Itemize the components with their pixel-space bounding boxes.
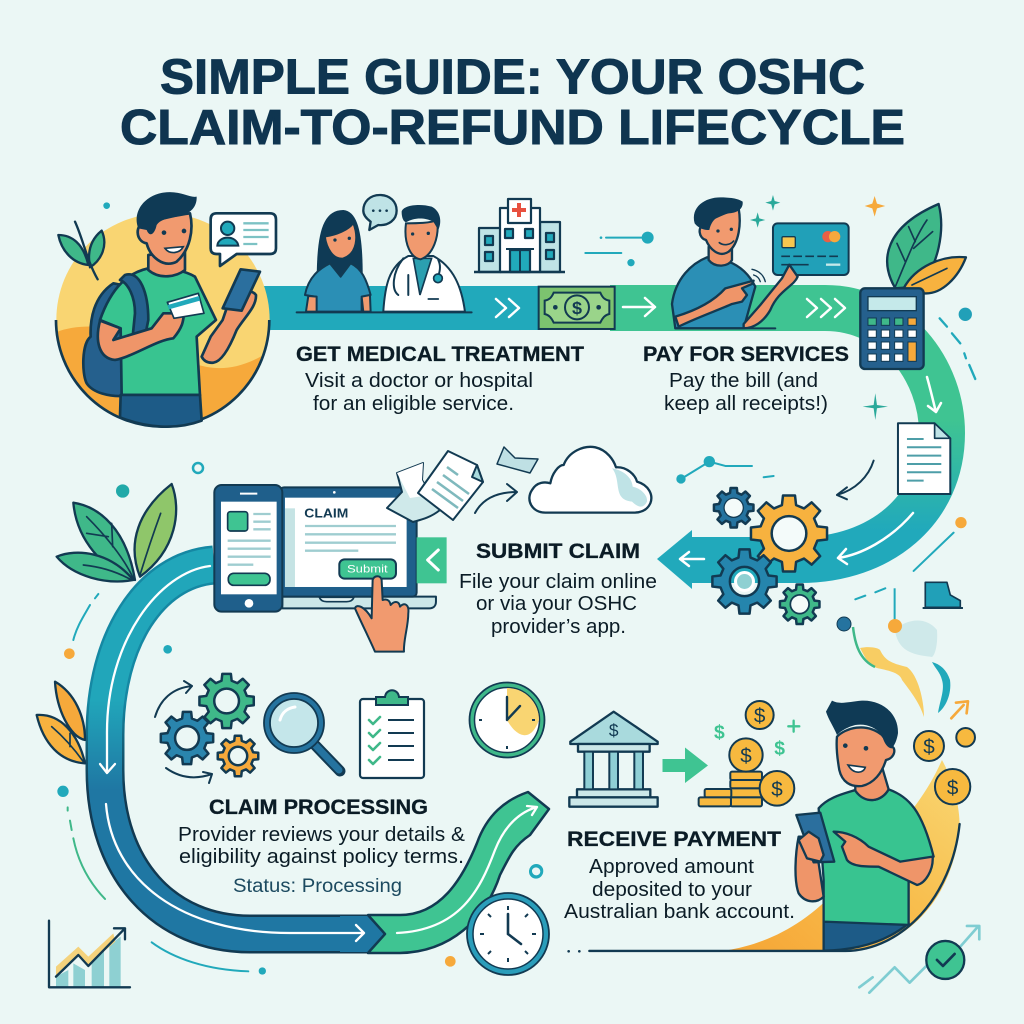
green tab xyxy=(417,537,447,583)
heading and text: claim processing xyxy=(178,796,466,897)
cloud xyxy=(529,447,651,513)
heading and text: claim processing: Status: Processing xyxy=(233,876,402,897)
arms xyxy=(675,281,754,327)
title xyxy=(120,50,905,155)
shirt xyxy=(819,789,934,925)
hair xyxy=(694,197,743,230)
phone xyxy=(214,485,282,612)
magnifying glass xyxy=(264,693,340,771)
chart bottom-left xyxy=(49,786,542,987)
money bill xyxy=(539,287,615,329)
heading and text: get medical treatment xyxy=(296,343,584,415)
plant xyxy=(58,222,104,279)
flying papers xyxy=(387,447,538,522)
plant orange xyxy=(37,682,85,763)
dot xyxy=(103,202,110,209)
phone xyxy=(223,269,260,311)
arrow and check xyxy=(951,701,968,718)
person with insurance card xyxy=(53,192,276,433)
submit button xyxy=(339,559,396,579)
neck xyxy=(855,767,889,800)
heading and text: claim processing: Provider reviews your details & xyxy=(178,824,466,846)
person receiving payment xyxy=(530,701,979,993)
backpack xyxy=(83,283,130,396)
document xyxy=(898,423,950,494)
heading and text: pay for services: Pay the bill (and xyxy=(669,370,818,392)
coins: $ xyxy=(774,739,785,760)
heading and text: receive payment: RECEIVE PAYMENT xyxy=(567,828,781,851)
pants xyxy=(120,395,202,427)
coins: $ xyxy=(947,776,959,799)
face xyxy=(700,208,740,254)
heading and text: receive payment xyxy=(564,828,795,923)
hand xyxy=(355,576,408,652)
heading and text: submit claim: File your claim online xyxy=(459,571,657,593)
coins: $ xyxy=(754,704,766,727)
plant behind calculator xyxy=(887,204,966,293)
doctor xyxy=(383,205,465,312)
hair xyxy=(826,701,898,748)
small decorative ring xyxy=(193,463,203,473)
arrow: dark curve to gears xyxy=(837,461,874,499)
arrow: band chevrons xyxy=(496,298,941,566)
heading and text: claim processing: eligibility against policy terms. xyxy=(179,846,464,868)
neck xyxy=(709,247,732,266)
heading and text: submit claim: SUBMIT CLAIM xyxy=(476,540,640,563)
hand and phone xyxy=(795,813,834,901)
heading and text: claim processing: CLAIM PROCESSING xyxy=(209,796,428,819)
coins: $ xyxy=(771,778,783,801)
screen xyxy=(280,487,417,597)
speech bubble xyxy=(211,213,276,266)
line graph doodle xyxy=(676,456,774,484)
title: SIMPLE GUIDE: YOUR OSHC xyxy=(160,50,865,104)
shirt xyxy=(100,268,216,395)
heading and text: receive payment: Approved amount xyxy=(589,856,754,878)
heading and text: get medical treatment: GET MEDICAL TREATMENT xyxy=(296,343,584,366)
coins: $ xyxy=(714,723,725,744)
heading and text: submit claim: or via your OSHC xyxy=(476,593,637,615)
hospital xyxy=(474,199,565,272)
bank xyxy=(569,712,658,807)
clipboard checklist xyxy=(360,690,424,778)
strap xyxy=(120,274,148,347)
arm xyxy=(834,832,933,885)
neck xyxy=(148,250,185,276)
heading and text: pay for services: PAY FOR SERVICES xyxy=(643,343,849,366)
coins xyxy=(699,701,975,806)
laptop with claim form xyxy=(214,485,447,652)
clock top xyxy=(470,682,544,758)
pants xyxy=(824,922,909,951)
plant left xyxy=(57,484,176,659)
hair xyxy=(137,192,197,234)
face xyxy=(138,213,191,264)
coins: $ xyxy=(740,745,752,768)
processing gears xyxy=(155,674,258,783)
swirls xyxy=(837,617,950,717)
coins: $ xyxy=(923,735,935,758)
heading and text: pay for services xyxy=(643,343,849,415)
arrow: green band to payment xyxy=(368,792,549,953)
sparkles xyxy=(750,195,888,420)
submit button: Submit xyxy=(347,564,388,576)
small teal icon xyxy=(925,582,960,607)
title: CLAIM-TO-REFUND LIFECYCLE xyxy=(120,101,905,155)
arrow: bank to coins xyxy=(662,748,708,783)
payment sweep xyxy=(567,760,960,953)
heading and text: submit claim xyxy=(459,540,657,638)
decorative marks right side xyxy=(676,308,975,620)
card xyxy=(167,293,204,318)
patient and doctor xyxy=(297,195,472,312)
heading and text: receive payment: Australian bank account. xyxy=(564,901,795,923)
bank: $ xyxy=(609,721,619,741)
gears cluster xyxy=(712,488,827,624)
patient xyxy=(305,210,371,312)
clock bottom xyxy=(467,893,549,975)
form heading: CLAIM xyxy=(304,506,348,521)
smile xyxy=(165,247,183,253)
money bill: $ xyxy=(572,298,582,318)
heading and text: get medical treatment: Visit a doctor or hospital xyxy=(305,370,533,392)
laptop base xyxy=(282,597,436,608)
face xyxy=(837,727,894,786)
heading and text: submit claim: provider’s app. xyxy=(491,616,626,638)
card xyxy=(773,223,849,275)
left flow band xyxy=(100,565,549,953)
left arm xyxy=(98,313,184,360)
speech bubble xyxy=(363,195,397,230)
heading and text: receive payment: deposited to your xyxy=(592,879,752,901)
heading and text: get medical treatment: for an eligible service. xyxy=(313,393,514,415)
orange and yellow circle xyxy=(53,213,270,433)
top flow band xyxy=(262,286,942,589)
calculator xyxy=(860,288,924,369)
heading and text: pay for services: keep all receipts!) xyxy=(664,393,828,415)
decorative dots and lines near hospital xyxy=(585,232,654,266)
shirt xyxy=(672,257,755,328)
right arm xyxy=(202,291,256,363)
person paying xyxy=(672,195,888,420)
